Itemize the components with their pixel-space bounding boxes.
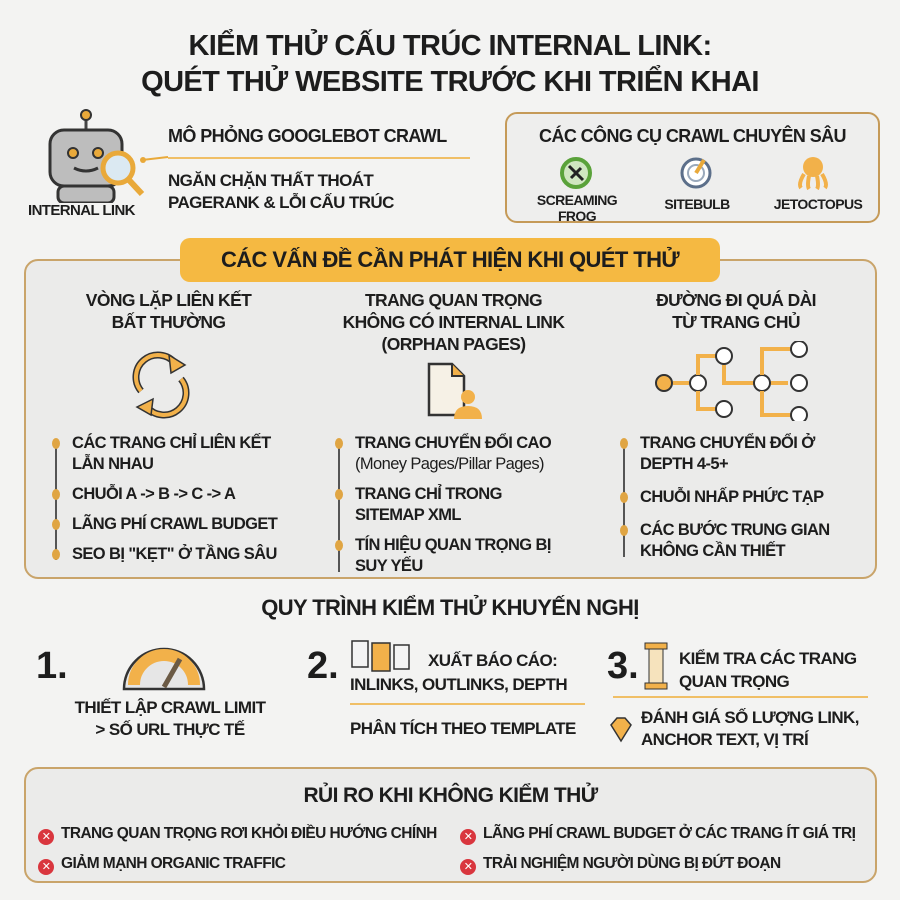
text: prevent loss: PAGERANK & LỖI CẤU TRÚC bbox=[168, 193, 394, 212]
bullets col3 bbox=[620, 433, 860, 571]
bullets col1: SEO BỊ "KẸT" Ở TẦNG SÂU bbox=[72, 545, 277, 563]
label: jetoctopus: JETOCTOPUS bbox=[774, 196, 862, 212]
number 2: 2. bbox=[307, 645, 339, 687]
panel: crawl tools bbox=[505, 112, 880, 223]
bullets col1 bbox=[52, 433, 297, 574]
heading: col2: KHÔNG CÓ INTERNAL LINK bbox=[343, 312, 564, 332]
panel: risks: ✕ bbox=[42, 861, 50, 873]
bullets col2 bbox=[335, 433, 580, 586]
panel: issues bbox=[24, 259, 877, 579]
column 3: long paths bbox=[620, 290, 830, 560]
icon: diamond bbox=[610, 717, 632, 742]
bullets col3: CHUỖI NHẤP PHỨC TẠP bbox=[640, 488, 824, 506]
column 2: orphan pages bbox=[335, 290, 565, 575]
bullets col2: TRANG CHỈ TRONG bbox=[355, 485, 502, 503]
heading: col3: ĐƯỜNG ĐI QUÁ DÀI bbox=[656, 290, 816, 310]
bullets col3: CÁC BƯỚC TRUNG GIAN bbox=[640, 521, 830, 539]
heading: col2: TRANG QUAN TRỌNG bbox=[365, 290, 542, 310]
step 2 bbox=[307, 640, 585, 738]
text step 3 bbox=[679, 649, 856, 691]
header pill: issues: CÁC VẤN ĐỀ CẦN PHÁT HIỆN KHI QUÉT THỬ bbox=[221, 247, 679, 272]
label: screaming frog bbox=[537, 192, 617, 224]
panel: risks: ✕ bbox=[464, 831, 472, 843]
text step 2 bbox=[350, 651, 567, 694]
bullets col3: TRANG CHUYỂN ĐỔI Ở bbox=[640, 434, 815, 452]
bullets col1: LÃNG PHÍ CRAWL BUDGET bbox=[72, 515, 277, 533]
bullets col2: SUY YẾU bbox=[355, 557, 423, 575]
heading: col1 bbox=[86, 290, 252, 332]
bullets col1: CÁC TRANG CHỈ LIÊN KẾT LẪN NHAU bbox=[72, 434, 271, 473]
heading: col1: VÒNG LẶP LIÊN KẾT bbox=[86, 290, 251, 310]
bullets col2: SITEMAP XML bbox=[355, 506, 461, 524]
header pill: issues bbox=[180, 238, 720, 282]
step 3 bbox=[607, 642, 868, 749]
panel: risks: TRẢI NGHIỆM NGƯỜI DÙNG BỊ ĐỨT ĐOẠN bbox=[483, 855, 781, 872]
heading: tools: CÁC CÔNG CỤ CRAWL CHUYÊN SÂU bbox=[539, 126, 846, 146]
icon: path tree bbox=[655, 341, 808, 421]
icon: screaming frog bbox=[560, 157, 592, 189]
icon: document user bbox=[428, 362, 482, 419]
text step 1 bbox=[74, 698, 266, 739]
bullets col2: TÍN HIỆU QUAN TRỌNG BỊ bbox=[355, 536, 551, 554]
icon: documents bbox=[351, 640, 410, 672]
bullets col3: KHÔNG CẦN THIẾT bbox=[640, 542, 785, 560]
heading: col2: (ORPHAN PAGES) bbox=[382, 334, 525, 354]
bullets col1: CHUỖI A -> B -> C -> A bbox=[72, 485, 235, 503]
text step 3: KIỂM TRA CÁC TRANG bbox=[679, 649, 856, 668]
icon: pillar bbox=[644, 642, 668, 690]
label: screaming frog: SCREAMING bbox=[537, 192, 617, 208]
column 1: link loops bbox=[52, 290, 278, 563]
panel: risks: ✕ bbox=[42, 831, 50, 843]
text: template analysis: PHÂN TÍCH THEO TEMPLATE bbox=[350, 719, 576, 738]
bullets col3: DEPTH 4-5+ bbox=[640, 455, 728, 473]
icon: octopus bbox=[798, 157, 828, 190]
risk items bbox=[38, 824, 855, 875]
title: KIỂM THỬ CẤU TRÚC INTERNAL LINK: bbox=[188, 30, 712, 62]
title: QUÉT THỬ WEBSITE TRƯỚC KHI TRIỂN KHAI bbox=[141, 66, 759, 98]
text: prevent loss bbox=[168, 171, 394, 212]
heading: process: QUY TRÌNH KIỂM THỬ KHUYẾN NGHỊ bbox=[261, 595, 639, 620]
heading: risks: RỦI RO KHI KHÔNG KIỂM THỬ bbox=[303, 784, 598, 807]
label: sitebulb: SITEBULB bbox=[664, 196, 730, 212]
text step 1: > SỐ URL THỰC TẾ bbox=[95, 720, 245, 739]
label: internal link: INTERNAL LINK bbox=[28, 202, 135, 219]
panel: risks: LÃNG PHÍ CRAWL BUDGET Ở CÁC TRANG ÍT GIÁ TRỊ bbox=[483, 825, 855, 842]
text: evaluate links bbox=[641, 708, 859, 749]
step 1 bbox=[36, 645, 266, 739]
heading: col3 bbox=[656, 290, 816, 332]
icon: gauge bbox=[122, 648, 206, 690]
text: prevent loss: NGĂN CHẶN THẤT THOÁT bbox=[168, 171, 373, 190]
heading: col1: BẤT THƯỜNG bbox=[112, 312, 225, 332]
icon: sitebulb bbox=[680, 158, 712, 188]
panel: risks bbox=[24, 767, 877, 883]
heading: col2 bbox=[343, 290, 565, 354]
heading: col3: TỪ TRANG CHỦ bbox=[672, 312, 800, 332]
panel: risks: TRANG QUAN TRỌNG RƠI KHỎI ĐIỀU HƯỚNG CHÍNH bbox=[61, 825, 437, 842]
text: evaluate links: ĐÁNH GIÁ SỐ LƯỢNG LINK, bbox=[641, 708, 859, 727]
text step 2: XUẤT BÁO CÁO: bbox=[428, 651, 557, 670]
icon: cycle arrows bbox=[132, 352, 190, 418]
number 3: 3. bbox=[607, 645, 639, 687]
text: googlebot crawl: MÔ PHỎNG GOOGLEBOT CRAWL bbox=[168, 126, 447, 146]
panel: risks: GIẢM MẠNH ORGANIC TRAFFIC bbox=[61, 855, 285, 872]
bullets col2: (Money Pages/Pillar Pages) bbox=[355, 455, 544, 473]
icon: robot with magnifier bbox=[48, 109, 168, 203]
text step 2: INLINKS, OUTLINKS, DEPTH bbox=[350, 675, 567, 694]
text: evaluate links: ANCHOR TEXT, VỊ TRÍ bbox=[641, 730, 808, 749]
title bbox=[141, 29, 759, 98]
bullets col2: TRANG CHUYỂN ĐỔI CAO bbox=[355, 434, 551, 452]
panel: risks: ✕ bbox=[464, 861, 472, 873]
label: screaming frog: FROG bbox=[558, 208, 596, 224]
text step 1: THIẾT LẬP CRAWL LIMIT bbox=[75, 698, 265, 717]
text step 3: QUAN TRỌNG bbox=[679, 672, 789, 691]
number 1: 1. bbox=[36, 645, 68, 687]
